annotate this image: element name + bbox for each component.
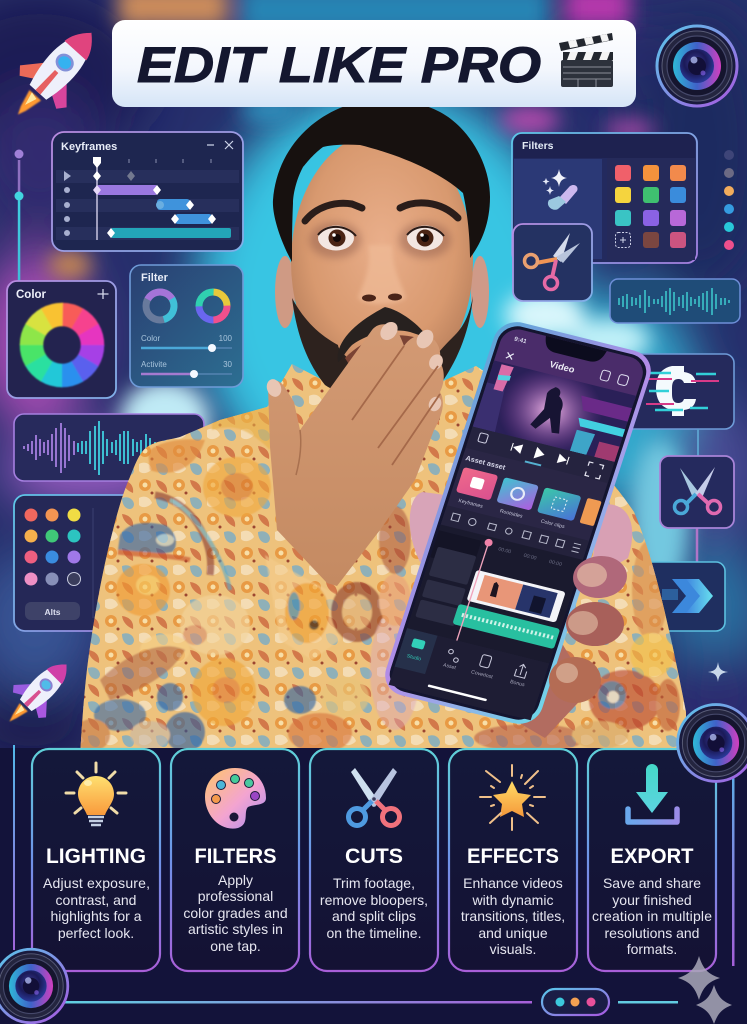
mouth shadow (345, 335, 418, 390)
mustache (338, 307, 428, 362)
tiles: Color clips (540, 519, 566, 530)
nose (358, 245, 406, 304)
title banner (112, 20, 636, 107)
icon: camera lens top right (657, 26, 737, 106)
panel: scissors right (660, 456, 734, 528)
footer rail (60, 989, 678, 1015)
panel: swatches (14, 495, 134, 631)
panel: filter (130, 265, 243, 387)
icon: rocket lower (0, 648, 83, 738)
tab bar: Bonus (509, 679, 526, 688)
filters description: color grades and (183, 905, 288, 921)
fingers behind phone (410, 492, 632, 738)
export description: creation in multiple (592, 908, 712, 924)
icon: star burst (480, 765, 545, 830)
phone screen: Video (548, 359, 576, 375)
phone screen: Asset asset (464, 453, 507, 472)
color heading: Color (16, 289, 47, 301)
status dots (724, 150, 734, 250)
panel: color wheel (7, 281, 116, 398)
icon: camera lens bottom left (0, 949, 68, 1023)
filters description: professional (198, 888, 273, 904)
panel: scissors upper (513, 224, 592, 301)
filter heading: Filter (141, 272, 169, 284)
effects description: with dynamic (472, 892, 553, 908)
card: cuts (310, 749, 438, 971)
beard (292, 296, 473, 398)
panel: filter: Activite (141, 360, 167, 369)
panel: filter: Color (141, 334, 160, 343)
export description (592, 875, 712, 957)
tab bar: Studio (406, 653, 422, 663)
hair (273, 99, 490, 262)
cuts heading: CUTS (345, 845, 403, 868)
timeline (406, 524, 583, 666)
icon: download (628, 764, 677, 822)
alts button: Alts (44, 607, 61, 617)
filters description: artistic styles in (188, 921, 283, 937)
cuts description: and split clips (332, 908, 416, 924)
panel: filter: 100 (219, 334, 233, 343)
filter ring left (141, 287, 179, 325)
timeline: 00:00 (497, 546, 512, 555)
icon: scissors (348, 768, 400, 826)
panel: keyframes (52, 132, 243, 251)
card: filters (171, 749, 299, 971)
panel: glitch icon (620, 354, 734, 429)
tiles: Rootsides (499, 508, 524, 520)
person (70, 99, 700, 760)
card: lighting (32, 749, 160, 971)
phone (379, 317, 657, 729)
effects heading: EFFECTS (467, 845, 559, 868)
icon: rocket top (0, 12, 115, 136)
video preview (472, 360, 636, 462)
keyframes heading: Keyframes (61, 141, 117, 153)
lighting description: contrast, and (56, 892, 136, 908)
tab bar: Coverlost (470, 669, 494, 680)
export description: formats. (627, 941, 677, 957)
tab bar: Asset (442, 662, 457, 671)
eye shadow (309, 222, 451, 258)
effects description: Enhance videos (463, 875, 563, 891)
effects description: visuals. (490, 941, 536, 957)
export heading: EXPORT (610, 845, 694, 868)
tiles: Keyframes (457, 498, 484, 510)
neck (330, 360, 440, 440)
title text: EDIT LIKE PRO (137, 37, 541, 93)
icon: double chevron (662, 579, 713, 613)
eyes (318, 226, 444, 250)
icon: scissors blue pink (674, 467, 720, 514)
card: export (588, 749, 716, 971)
fingers on phone (549, 554, 629, 703)
footer pill (542, 989, 609, 1015)
ears (275, 256, 489, 328)
export description: resolutions and (605, 925, 699, 941)
filters description: one tap. (210, 938, 261, 954)
panel: audio waveform right (610, 279, 740, 323)
lighting description: highlights for a (50, 908, 142, 924)
export description: Save and share (603, 875, 701, 891)
phone screen (389, 326, 647, 720)
panel: chevrons (640, 562, 725, 631)
filters heading: FILTERS (194, 845, 276, 868)
icon: sparkle (708, 662, 728, 682)
face (291, 132, 473, 392)
panel: audio waveform left (14, 414, 204, 481)
card: effects (449, 749, 577, 971)
side rails (13, 745, 734, 966)
timeline: 00:00 (548, 559, 563, 568)
icon: magic wand (542, 169, 578, 210)
tab bar (389, 628, 549, 720)
cuts description (320, 875, 428, 941)
icon: camera lens bottom right (678, 705, 747, 781)
filters description: Apply (218, 872, 253, 888)
icon: scissors orange pink (524, 233, 580, 290)
lighting heading: LIGHTING (46, 845, 146, 868)
icon: light bulb (66, 763, 126, 825)
filter ring right (199, 292, 227, 320)
icon: palette (205, 768, 266, 829)
filters description (183, 872, 288, 954)
bottom panel background (0, 748, 747, 1024)
hand over mouth (264, 319, 446, 586)
swatch grid (615, 165, 686, 248)
lighting description: perfect look. (58, 925, 134, 941)
filters heading: Filters (522, 140, 554, 152)
effects description: transitions, titles, (461, 908, 565, 924)
shirt (70, 360, 700, 760)
export description: your finished (612, 892, 692, 908)
lighting description (43, 875, 150, 941)
cuts description: on the timeline. (327, 925, 421, 941)
icon: glitch letter (646, 366, 719, 416)
cuts description: remove bloopers, (320, 892, 428, 908)
panel: filters right (512, 133, 697, 263)
effects description: and unique (478, 925, 548, 941)
effects description (461, 875, 565, 957)
icon: clapperboard (559, 33, 613, 87)
color wheel (20, 303, 104, 387)
panel: filter: 30 (223, 360, 233, 369)
cuts description: Trim footage, (333, 875, 415, 891)
eyebrows (305, 203, 458, 221)
timeline: 00:00 (523, 553, 537, 562)
tiles (452, 467, 602, 537)
lighting description: Adjust exposure, (43, 875, 150, 891)
icon: sparkles watermark (678, 956, 732, 1024)
phone screen: 9:41 (513, 336, 528, 345)
vertical slider (14, 150, 24, 282)
